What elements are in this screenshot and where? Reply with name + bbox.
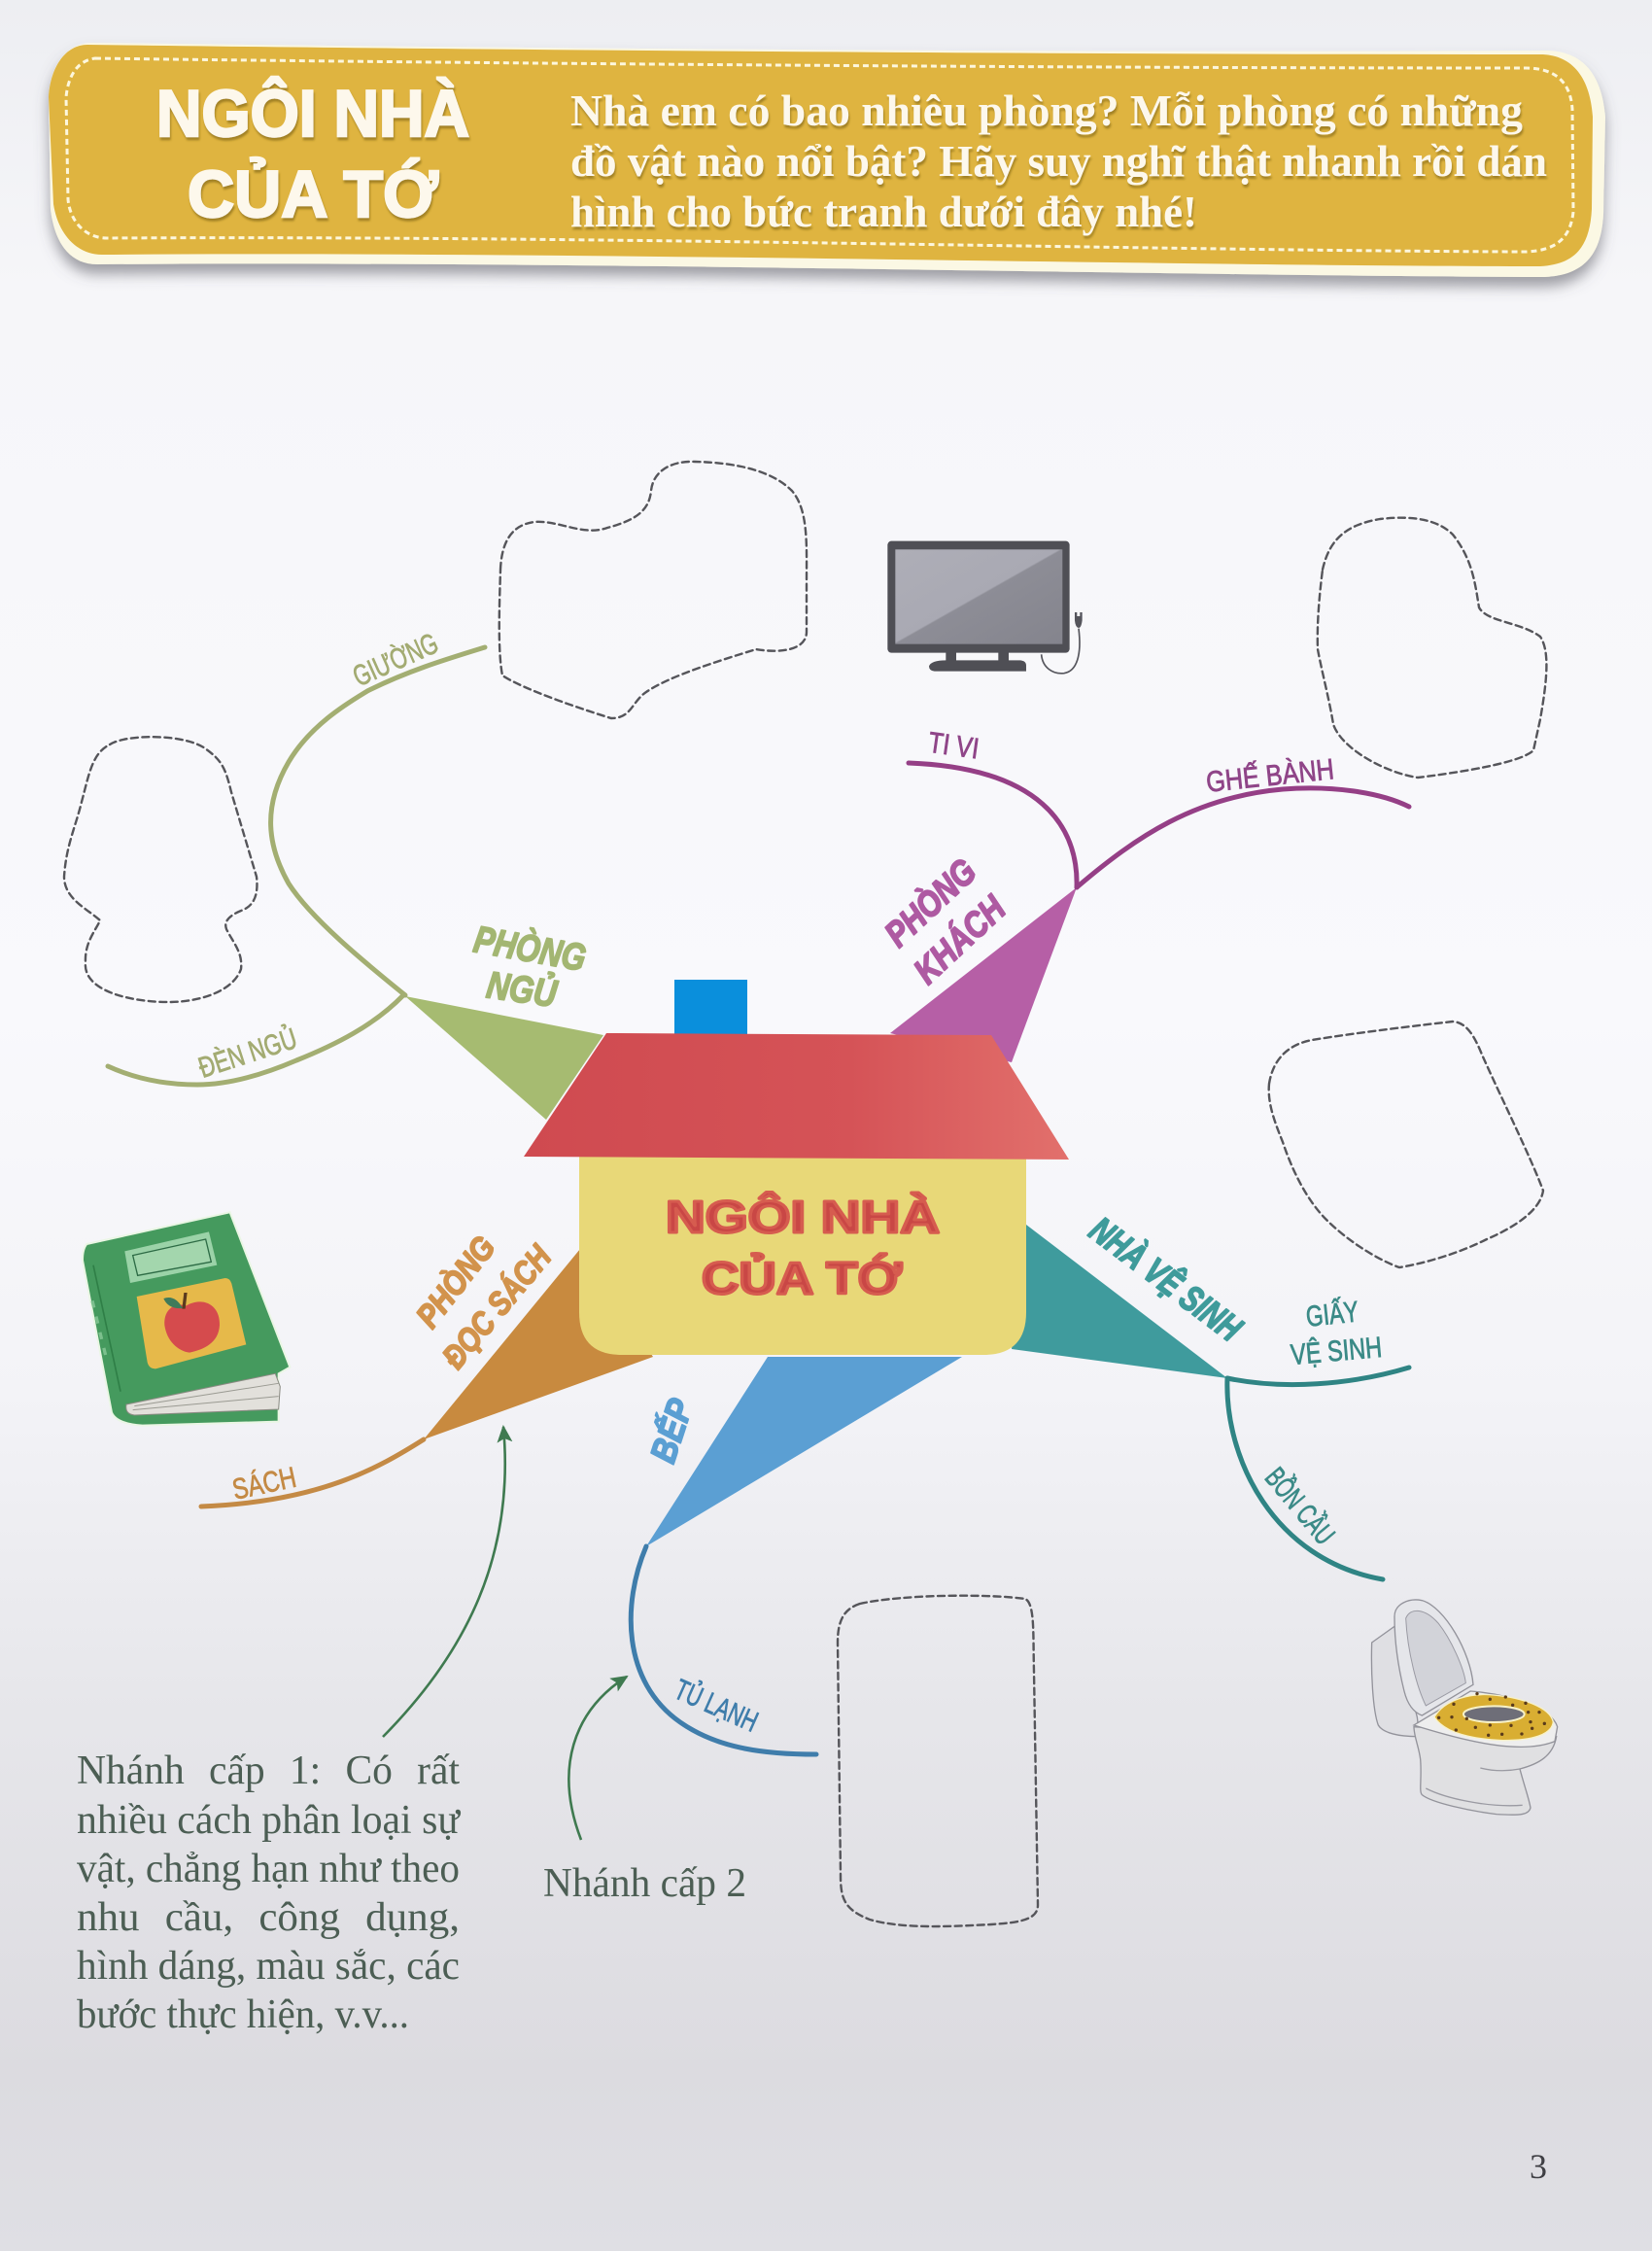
- label: toilet paper: [1290, 1295, 1383, 1371]
- arrow: level 2 branch: [568, 1677, 627, 1840]
- house title: [666, 1192, 940, 1303]
- label: reading room: [409, 1229, 560, 1375]
- book title plate: [124, 1231, 217, 1283]
- TV screen: [895, 549, 1062, 644]
- line: armchair: [1077, 788, 1409, 887]
- banner title: NGÔI NHÀ: [156, 76, 469, 151]
- dashed placeholder: toilet paper: [1269, 1022, 1543, 1267]
- apple stem and leaf: [182, 1293, 188, 1309]
- house: [524, 980, 1069, 1355]
- seat hole: [1463, 1706, 1525, 1722]
- spine marks: [92, 1300, 107, 1361]
- label: living room: KHÁCH: [907, 887, 1014, 991]
- label: bedroom: PHÒNG: [470, 918, 589, 980]
- kitchen wedge: [646, 1357, 962, 1546]
- house title: CỦA TỚ: [702, 1253, 903, 1303]
- banner yellow fill: [49, 45, 1593, 266]
- label: fridge: TỦ LẠNH: [670, 1673, 763, 1739]
- label: bedroom: [470, 918, 589, 1016]
- icon: toilet: [1371, 1600, 1558, 1815]
- note: level 1 branch: bước thực hiện, v.v...: [77, 1992, 409, 2037]
- branch: living room: [878, 727, 1409, 1062]
- banner instructions: [570, 86, 1547, 236]
- icon: television: [887, 541, 1083, 674]
- label: reading room: ĐỌC SÁCH: [435, 1238, 560, 1375]
- book spine line: [93, 1265, 120, 1392]
- note: level 2 branch: Nhánh cấp 2: [543, 1861, 746, 1906]
- banner sticker shape: [49, 43, 1605, 277]
- roof: [524, 1033, 1069, 1160]
- label: toilet paper: VỆ SINH: [1290, 1332, 1383, 1371]
- banner: [49, 43, 1605, 277]
- branch: reading room: [201, 1229, 653, 1506]
- label: armchair: GHẾ BÀNH: [1205, 752, 1335, 799]
- TV frame: [887, 541, 1070, 653]
- page number: 3: [1530, 2147, 1547, 2186]
- seat rim: [1414, 1691, 1558, 1747]
- book picture panel: [137, 1278, 246, 1368]
- label: bedroom: NGỦ: [484, 963, 560, 1016]
- label: TV: TI VI: [926, 727, 981, 766]
- toilet lid: [1394, 1600, 1473, 1715]
- TV cable and plug: [1042, 629, 1080, 674]
- icon: book: [83, 1212, 290, 1426]
- note: level 1 branch: [77, 1749, 461, 2037]
- line: lamp: [108, 995, 403, 1085]
- label: bathroom: NHÀ VỆ SINH: [1083, 1208, 1251, 1349]
- note: level 1 branch: nhiều cách phân loại sự: [77, 1798, 461, 1843]
- toilet bowl: [1414, 1727, 1557, 1815]
- branch: kitchen: [631, 1357, 962, 1754]
- line: toilet: [1227, 1378, 1383, 1579]
- banner title: [156, 76, 469, 231]
- apple: [164, 1301, 220, 1353]
- line: book: [201, 1439, 424, 1506]
- note: level 1 branch: nhu cầu, công dụng,: [77, 1895, 460, 1940]
- book pages: [126, 1373, 280, 1415]
- house body: [579, 1157, 1026, 1355]
- seat dots: [1437, 1692, 1546, 1737]
- reading room wedge: [424, 1249, 653, 1439]
- book halo and cover: [83, 1212, 290, 1426]
- label: bed: GIƯỜNG: [348, 628, 443, 693]
- banner stitched border: [66, 58, 1573, 252]
- dashed placeholder: bed: [499, 462, 807, 718]
- dashed placeholder: fridge: [838, 1596, 1038, 1926]
- note: level 1 branch: Nhánh cấp 1: Có rất: [77, 1749, 460, 1793]
- arrow: level 1 branch: [383, 1427, 505, 1737]
- bathroom wedge: [1012, 1225, 1227, 1378]
- line: toilet paper: [1227, 1368, 1409, 1385]
- label: living room: PHÒNG: [878, 851, 983, 954]
- branch: bathroom: [1012, 1208, 1409, 1579]
- label: toilet paper: GIẤY: [1304, 1295, 1360, 1333]
- banner title: CỦA TỚ: [188, 156, 438, 231]
- label: toilet: BỒN CẦU: [1258, 1461, 1341, 1551]
- banner instructions: hình cho bức tranh dưới đây nhé!: [570, 187, 1197, 236]
- branch: bedroom: [108, 628, 603, 1120]
- line: bed: [271, 647, 485, 995]
- line: TV: [909, 763, 1077, 887]
- label: book: SÁCH: [229, 1462, 299, 1506]
- banner instructions: đồ vật nào nổi bật? Hãy suy nghĩ thật nhanh rồi dán: [570, 136, 1547, 186]
- note: level 1 branch: hình dáng, màu sắc, các: [77, 1944, 460, 1989]
- label: kitchen: BẾP: [641, 1394, 701, 1468]
- label: living room: [878, 851, 1014, 991]
- label: reading room: PHÒNG: [409, 1229, 503, 1334]
- house title: NGÔI NHÀ: [666, 1192, 940, 1242]
- living room wedge: [890, 887, 1077, 1062]
- dashed placeholder: armchair: [1318, 518, 1546, 778]
- label: lamp: ĐÈN NGỦ: [194, 1022, 301, 1085]
- toilet tank: [1371, 1626, 1418, 1737]
- TV stand: [929, 651, 1026, 672]
- page lines: [133, 1383, 279, 1410]
- chimney: [674, 980, 747, 1034]
- note: level 1 branch: vật, chẳng hạn như theo: [77, 1847, 460, 1891]
- dashed placeholder: lamp: [64, 737, 257, 1002]
- line: fridge: [631, 1546, 816, 1754]
- banner instructions: Nhà em có bao nhiêu phòng? Mỗi phòng có những: [570, 86, 1523, 135]
- bedroom wedge: [405, 996, 603, 1120]
- bowl details: [1426, 1768, 1523, 1806]
- seat cover: [1434, 1695, 1553, 1741]
